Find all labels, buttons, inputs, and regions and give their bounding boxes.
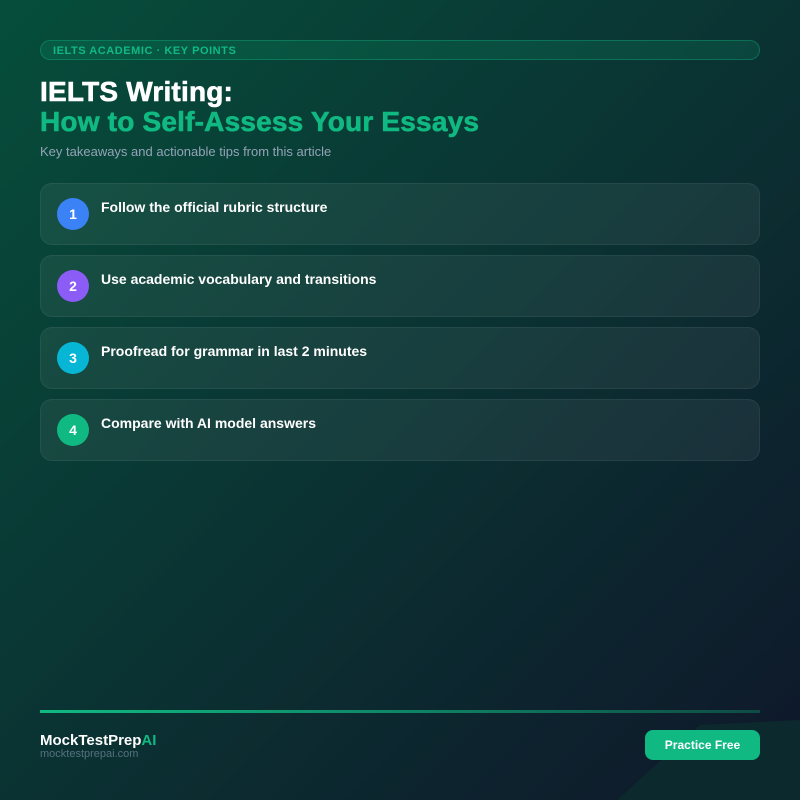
subtitle: Key takeaways and actionable tips from this article bbox=[40, 144, 331, 159]
panel: point 1 bbox=[40, 183, 760, 245]
brand url: mocktestprepai.com bbox=[40, 748, 138, 760]
panel: point 2 bbox=[40, 255, 760, 317]
title: IELTS Writing: bbox=[40, 76, 233, 107]
number badge 2: 2 bbox=[69, 278, 77, 294]
title: How to Self-Assess Your Essays bbox=[40, 106, 479, 137]
badge bbox=[40, 40, 760, 60]
panel: point 4 bbox=[40, 399, 760, 461]
number badge 1 bbox=[57, 198, 89, 230]
point 2 text: Use academic vocabulary and transitions bbox=[101, 271, 376, 287]
title bbox=[40, 76, 479, 138]
cta button bbox=[645, 730, 760, 760]
point 4 text: Compare with AI model answers bbox=[101, 415, 316, 431]
number badge 4 bbox=[57, 414, 89, 446]
number badge 2 bbox=[57, 270, 89, 302]
panel: point 3 bbox=[40, 327, 760, 389]
footer rule bbox=[40, 710, 760, 713]
number badge 4: 4 bbox=[69, 422, 77, 438]
cta button: Practice Free bbox=[665, 738, 740, 752]
number badge 3 bbox=[57, 342, 89, 374]
badge: IELTS ACADEMIC · KEY POINTS bbox=[53, 45, 236, 57]
point 1 text: Follow the official rubric structure bbox=[101, 199, 327, 215]
point 3 text: Proofread for grammar in last 2 minutes bbox=[101, 343, 367, 359]
brand name: MockTestPrepAI bbox=[40, 732, 156, 749]
number badge 1: 1 bbox=[69, 206, 77, 222]
number badge 3: 3 bbox=[69, 350, 77, 366]
